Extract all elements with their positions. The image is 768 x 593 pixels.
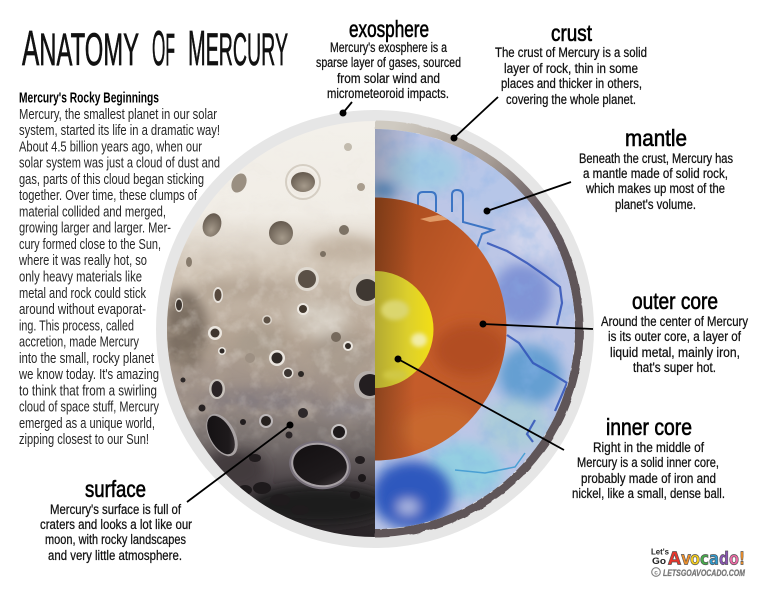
craters bbox=[175, 143, 382, 515]
arrow: outer core pointer bbox=[480, 320, 593, 329]
intro text block: metal and rock could stick bbox=[19, 286, 147, 302]
arrow: mantle pointer bbox=[484, 182, 571, 214]
label: exosphere: Mercury's exosphere is a bbox=[330, 40, 447, 55]
intro text block: cloud of space stuff, Mercury bbox=[19, 400, 160, 416]
label: outer core: liquid metal, mainly iron, bbox=[610, 345, 740, 360]
logo: Let's Go Avocado: A bbox=[668, 548, 681, 570]
logo: Let's Go Avocado: c bbox=[700, 548, 709, 570]
label: exosphere: exosphere bbox=[349, 16, 429, 42]
label: crust: places and thicker in others, bbox=[501, 76, 642, 91]
intro text block bbox=[18, 90, 220, 448]
label: inner core: inner core bbox=[606, 414, 692, 440]
intro text block: About 4.5 billion years ago, when our bbox=[19, 139, 202, 155]
label: mantle: which makes up most of the bbox=[585, 181, 725, 196]
arrow: surface pointer bbox=[187, 422, 294, 502]
label: crust: covering the whole planet. bbox=[506, 92, 636, 107]
intro text block: where it was really hot, so bbox=[18, 253, 147, 269]
label: surface: craters and looks a lot like our bbox=[40, 517, 192, 532]
label: inner core: Mercury is a solid inner core, bbox=[577, 455, 719, 470]
label: inner core bbox=[572, 414, 725, 501]
intro text block: accretion, made Mercury bbox=[19, 335, 140, 351]
label: outer core: outer core bbox=[632, 288, 718, 314]
label: outer core: that's super hot. bbox=[633, 360, 716, 375]
label: crust: crust bbox=[551, 20, 592, 46]
label: outer core bbox=[601, 288, 748, 375]
logo: Let's Go Avocado: o bbox=[690, 548, 700, 570]
label: mantle: Beneath the crust, Mercury has bbox=[579, 151, 733, 166]
label: exosphere: from solar wind and bbox=[337, 71, 440, 86]
surface mottling bbox=[163, 236, 390, 525]
label: mantle: planet's volume. bbox=[615, 197, 696, 212]
intro text block: emerged as a unique world, bbox=[19, 416, 155, 432]
intro text block: system, started its life in a dramatic way! bbox=[19, 123, 220, 139]
intro text block: Mercury's Rocky Beginnings bbox=[19, 90, 159, 106]
planet: inner core bbox=[375, 271, 434, 388]
planet: cratered surface half bbox=[167, 121, 375, 537]
label: crust: The crust of Mercury is a solid bbox=[495, 45, 647, 60]
logo: Let's Go Avocado: ! bbox=[739, 548, 745, 570]
intro text block: we know today. It's amazing bbox=[18, 367, 159, 383]
logo: Let's Go Avocado: LETSGOAVOCADO.COM bbox=[663, 568, 745, 578]
intro text block: around without evaporat- bbox=[19, 302, 146, 318]
planet: outer core bbox=[375, 197, 508, 461]
intro text block: cury formed close to the Sun, bbox=[19, 237, 161, 253]
planet: mantle bbox=[369, 125, 580, 535]
intro text block: Mercury, the smallest planet in our solar bbox=[19, 107, 217, 123]
title: OF bbox=[152, 22, 175, 76]
label: surface: moon, with rocky landscapes bbox=[45, 532, 186, 547]
label: mantle bbox=[579, 125, 733, 212]
intro text block: zipping closest to our Sun! bbox=[19, 432, 149, 448]
logo: Let's Go Avocado: o bbox=[729, 548, 739, 570]
label: mantle: mantle bbox=[625, 125, 687, 151]
intro text block: gas, parts of this cloud began sticking bbox=[19, 172, 204, 188]
label: surface: Mercury's surface is full of bbox=[50, 502, 181, 517]
label: inner core: nickel, like a small, dense ball. bbox=[572, 486, 725, 501]
label: inner core: probably made of iron and bbox=[581, 471, 716, 486]
mantle veins bbox=[417, 189, 496, 248]
label: surface: and very little atmosphere. bbox=[48, 548, 182, 563]
arrow: crust pointer bbox=[450, 97, 498, 142]
label: exosphere bbox=[316, 16, 461, 101]
logo: Let's Go Avocado: d bbox=[719, 548, 729, 570]
arrow: exosphere pointer bbox=[340, 102, 352, 116]
label: mantle: a mantle made of solid rock, bbox=[583, 166, 728, 181]
intro text block: material collided and merged, bbox=[19, 204, 166, 220]
infographic canvas: MERCURY bbox=[188, 22, 288, 76]
intro text block: ing. This process, called bbox=[19, 318, 134, 334]
logo: Let's Go Avocado: Let's bbox=[651, 548, 670, 556]
intro text block: solar system was just a cloud of dust and bbox=[19, 156, 220, 172]
arrow: inner core pointer bbox=[394, 356, 564, 450]
intro text block: to think that from a swirling bbox=[19, 383, 157, 399]
label: surface bbox=[40, 476, 192, 563]
logo: Let's Go Avocado: a bbox=[709, 548, 719, 570]
label: exosphere: micrometeoroid impacts. bbox=[327, 86, 449, 101]
logo: Let's Go Avocado: v bbox=[681, 548, 691, 570]
logo: Let's Go Avocado: Go bbox=[652, 556, 667, 566]
logo: Let's Go Avocado: c bbox=[654, 570, 658, 576]
title: ANATOMY bbox=[22, 22, 139, 76]
planet: crust ring bbox=[375, 120, 584, 538]
exosphere halo bbox=[156, 110, 594, 548]
intro text block: growing larger and larger. Mer- bbox=[19, 221, 171, 237]
intro text block: together. Over time, these clumps of bbox=[19, 188, 198, 204]
label: crust bbox=[495, 20, 647, 107]
label: exosphere: sparse layer of gases, sourced bbox=[316, 55, 461, 70]
label: inner core: Right in the middle of bbox=[593, 440, 704, 455]
intro text block: only heavy materials like bbox=[19, 270, 142, 286]
logo: Let's Go Avocado bbox=[651, 548, 745, 578]
label: crust: layer of rock, thin in some bbox=[504, 61, 638, 76]
label: surface: surface bbox=[85, 476, 146, 502]
label: outer core: is its outer core, a layer of bbox=[608, 329, 741, 344]
intro text block: into the small, rocky planet bbox=[19, 351, 154, 367]
